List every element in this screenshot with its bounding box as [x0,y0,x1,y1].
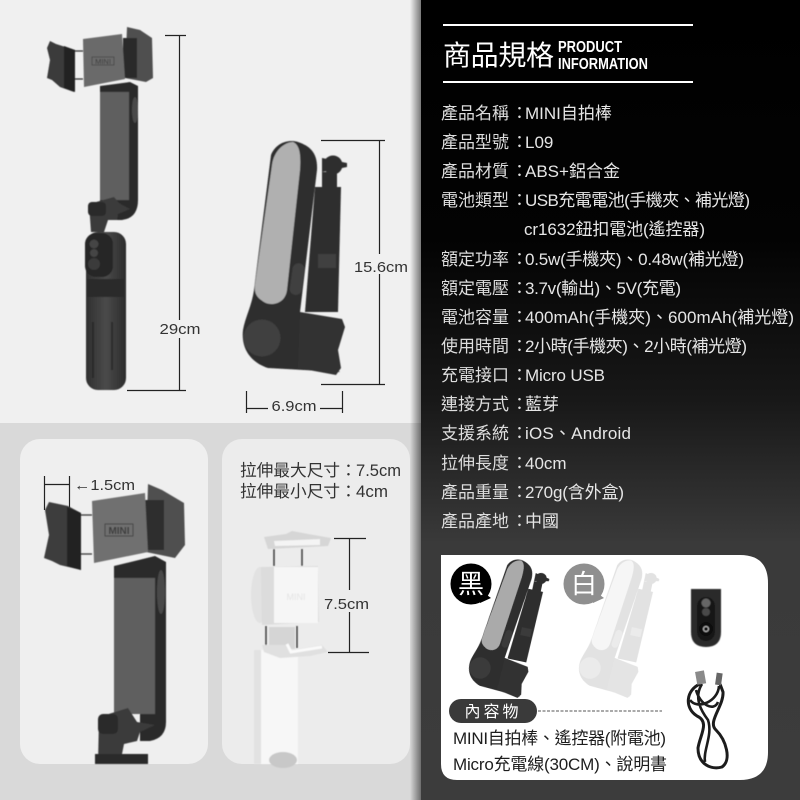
label: contents: 內容物 [464,703,522,721]
specification list: iOS、Android [525,424,631,443]
icon: USB cable [688,670,727,768]
specification list: Micro USB [525,366,605,385]
dimension: 15.6cm [321,140,408,384]
heading: product specifications: 商品規格 [443,40,554,71]
product: black version [465,554,552,699]
text: extension sizes [240,461,401,501]
specification list: 中國 [525,512,559,531]
text: package contents: MINI自拍棒、遙控器(附電池) [453,729,666,748]
specification list: 電池類型： [441,191,528,210]
right dark background [421,0,800,800]
badge: white [564,564,604,604]
text: package contents [453,729,667,774]
text: package contents: Micro充電線(30CM)、說明書 [453,755,667,774]
specification list: 0.5w(手機夾)、0.48w(補光燈) [525,250,744,269]
badge: black: 黑 [458,569,484,599]
dimension: 1.5cm [44,476,135,510]
product: white version [575,554,662,699]
specification list: 產品名稱： [441,104,528,123]
specification list: 支援系統： [441,424,528,443]
specification list: 產品重量： [441,483,528,502]
dimension: 29cm [127,35,200,390]
product: white clamp extended [251,531,331,768]
badge: black [450,564,492,604]
specification list: 藍芽 [525,395,559,414]
panel: clamp width [20,439,208,764]
specification list: 產品材質： [441,162,528,181]
heading: product specifications: PRODUCT [558,39,622,56]
specification list: 產品型號： [441,133,528,152]
product: extended selfie stick [47,27,153,390]
product: clamp close-up: MINI [108,526,130,537]
dimension: 7.5cm: 7.5cm [324,596,369,613]
text: extension sizes: 拉伸最大尺寸： [240,461,357,480]
specification list [441,104,794,531]
text: extension sizes: 7.5cm [356,462,401,480]
dimension: 6.9cm: 6.9cm [272,398,316,415]
specification list: 2小時(手機夾)、2小時(補光燈) [525,337,747,356]
label: contents [449,699,662,723]
specification list: 連接方式： [441,395,528,414]
left bottom background [0,423,421,800]
specification list: L09 [525,133,553,152]
dimension: 7.5cm [324,538,369,652]
badge: white: 白 [571,569,597,599]
panel: colours and contents [441,554,768,780]
specification list: 270g(含外盒) [525,483,624,502]
specification list: ABS+鋁合金 [525,162,620,181]
product: extended selfie stick: MINI [95,57,111,66]
specification list: 電池容量： [441,308,528,327]
specification list: USB充電電池(手機夾、補光燈) [525,191,750,210]
divider shadow [410,0,421,800]
heading: product specifications: INFORMATION [558,56,648,73]
specification list: 使用時間： [441,336,528,356]
product: white clamp extended: MINI [286,592,306,602]
text: extension sizes: 拉伸最小尺寸： [240,482,357,501]
dimension: 15.6cm: 15.6cm [354,259,408,276]
specification list: 額定功率： [441,250,528,269]
heading: product specifications [443,24,693,83]
product: clamp close-up [44,484,185,764]
dimension: 6.9cm [246,391,343,415]
panel: extension range [222,439,410,768]
icon: remote control [691,589,721,647]
specification list: 充電接口： [441,366,528,385]
text: extension sizes: 4cm [356,483,388,501]
specification list: cr1632鈕扣電池(遙控器) [524,220,705,239]
dimension: 1.5cm: ←1.5cm [74,477,135,494]
specification list: 400mAh(手機夾)、600mAh(補光燈) [525,308,794,327]
specification list: 拉伸長度： [441,454,528,473]
specification list: 40cm [525,454,567,473]
dimension: 29cm: 29cm [160,321,200,338]
product: folded selfie stick [243,141,347,375]
specification list: 3.7v(輸出)、5V(充電) [525,279,681,298]
left top background [0,0,421,423]
specification list: 產品產地： [441,512,528,531]
specification list: 額定電壓： [441,279,528,298]
specification list: MINI自拍棒 [525,104,612,123]
